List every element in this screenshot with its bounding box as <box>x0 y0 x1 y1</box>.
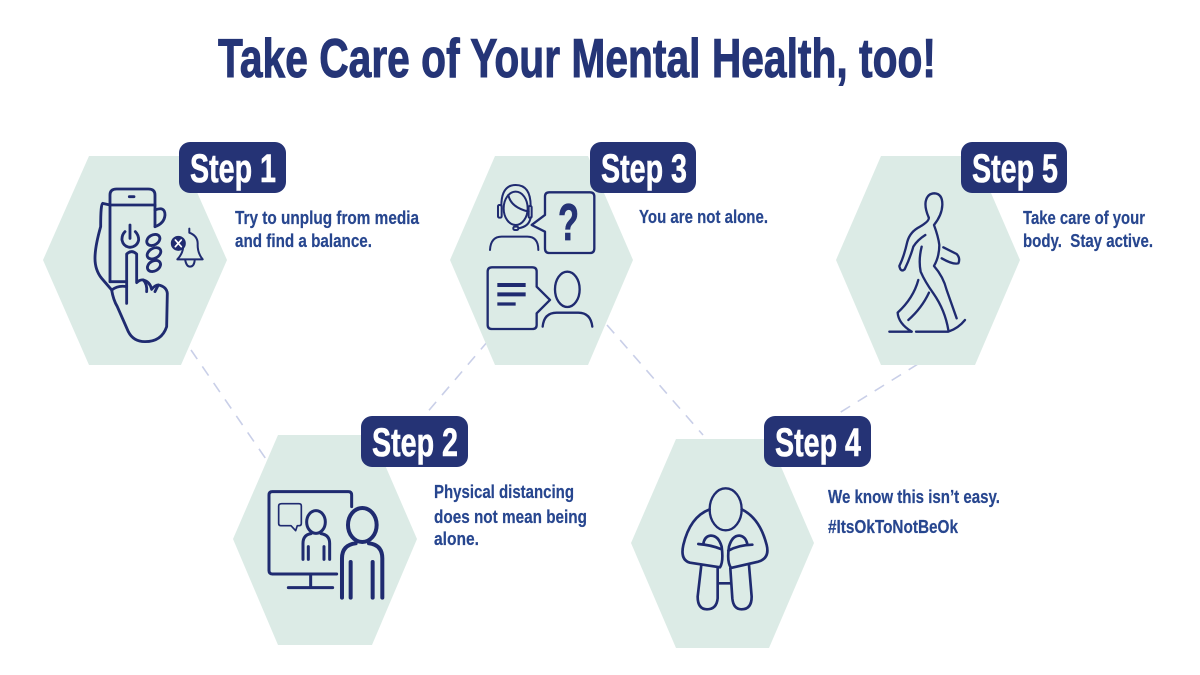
text: step 2: Physical distancing <box>434 481 574 502</box>
hexagon: step 5 <box>836 156 1020 365</box>
badge: step 1 <box>179 142 286 193</box>
text: step 4: We know this isn’t easy. <box>828 486 1000 507</box>
panel: step 1 <box>43 142 420 365</box>
text: step 2: does not mean being <box>434 506 587 527</box>
panel: step 5 <box>836 142 1153 365</box>
badge: step 3: Step 3 <box>601 147 687 191</box>
icon: helpline agent and caller with speech bubbles <box>488 185 594 329</box>
panel: step 4 <box>631 416 1000 648</box>
panel: step 2 <box>233 416 587 645</box>
question mark: ? <box>558 194 579 252</box>
text: step 2: alone. <box>434 528 479 549</box>
hexagon: step 4 <box>631 439 814 648</box>
text: step 2 <box>434 481 587 549</box>
badge: step 4 <box>764 416 871 467</box>
hexagon: step 2 <box>233 435 417 645</box>
connector lines between steps <box>191 325 918 462</box>
hexagon: step 1 <box>43 156 227 365</box>
badge: step 5: Step 5 <box>972 147 1058 191</box>
text: step 1 <box>235 207 420 251</box>
text: step 3: You are not alone. <box>639 206 768 227</box>
text: step 4: #ItsOkToNotBeOk <box>828 516 959 537</box>
badge: step 1: Step 1 <box>190 147 276 191</box>
text: step 1: and find a balance. <box>235 230 372 251</box>
icon: person at video call monitor <box>269 492 382 598</box>
text: step 5: Take care of your <box>1023 207 1145 228</box>
badge: step 3 <box>590 142 696 193</box>
text: step 5: body. Stay active. <box>1023 230 1153 251</box>
badge: step 2: Step 2 <box>372 421 458 465</box>
badge: step 2 <box>361 416 468 467</box>
text: step 4 <box>828 486 1000 537</box>
hexagon: step 3 <box>450 156 633 365</box>
badge: step 4: Step 4 <box>775 421 862 465</box>
text: step 5 <box>1023 207 1153 251</box>
icon: person sitting hugging knees <box>682 488 767 609</box>
panel: step 3 <box>450 142 768 365</box>
title: Take Care of Your Mental Health, too! <box>218 27 936 89</box>
badge: step 5 <box>961 142 1067 193</box>
icon: hand on phone with power button and muted bell <box>95 189 203 342</box>
icon: walking person <box>889 193 965 332</box>
text: step 1: Try to unplug from media <box>235 207 420 228</box>
